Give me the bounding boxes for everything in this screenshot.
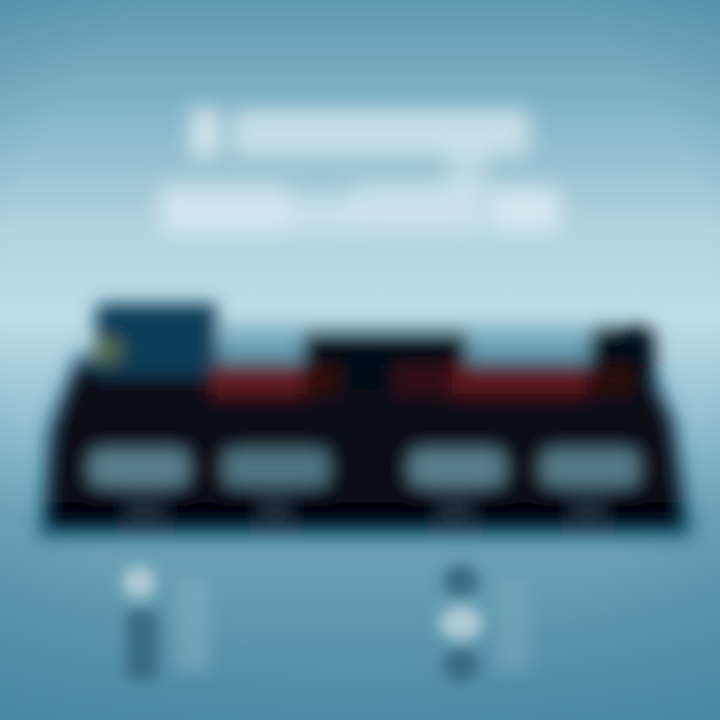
- title: illegible blurred heading: [160, 108, 560, 234]
- panel 2: [224, 450, 328, 486]
- dark main body: [46, 366, 684, 528]
- light dot: [122, 566, 156, 598]
- center dark block: [303, 332, 467, 390]
- top-left blue block: [96, 304, 218, 376]
- right dark block: [590, 327, 654, 393]
- right red band: [452, 364, 588, 394]
- lower left label: illegible blurred marker: [122, 566, 210, 680]
- outer blue halo: [38, 352, 694, 538]
- yellow-green indicator: [95, 337, 121, 363]
- center red band: [394, 364, 456, 394]
- dark dot: [443, 565, 479, 597]
- bottom connector row: [50, 490, 680, 526]
- panel 1: [90, 450, 188, 486]
- left red band dark end: [302, 364, 338, 394]
- left red band: [212, 364, 306, 394]
- dark bar: [126, 610, 158, 680]
- right red band dark end: [586, 364, 634, 394]
- dark dot lower: [443, 648, 479, 682]
- faint text column: [496, 578, 530, 672]
- title line 1: [190, 108, 530, 195]
- title line 2: [160, 184, 560, 234]
- teal back strip: [205, 322, 615, 370]
- light dot: [439, 606, 483, 640]
- panel 3: [410, 450, 504, 486]
- lower right label: illegible blurred marker: [439, 565, 530, 682]
- panel 4: [542, 450, 638, 486]
- faint text column: [176, 578, 210, 672]
- device graphic: [38, 304, 694, 538]
